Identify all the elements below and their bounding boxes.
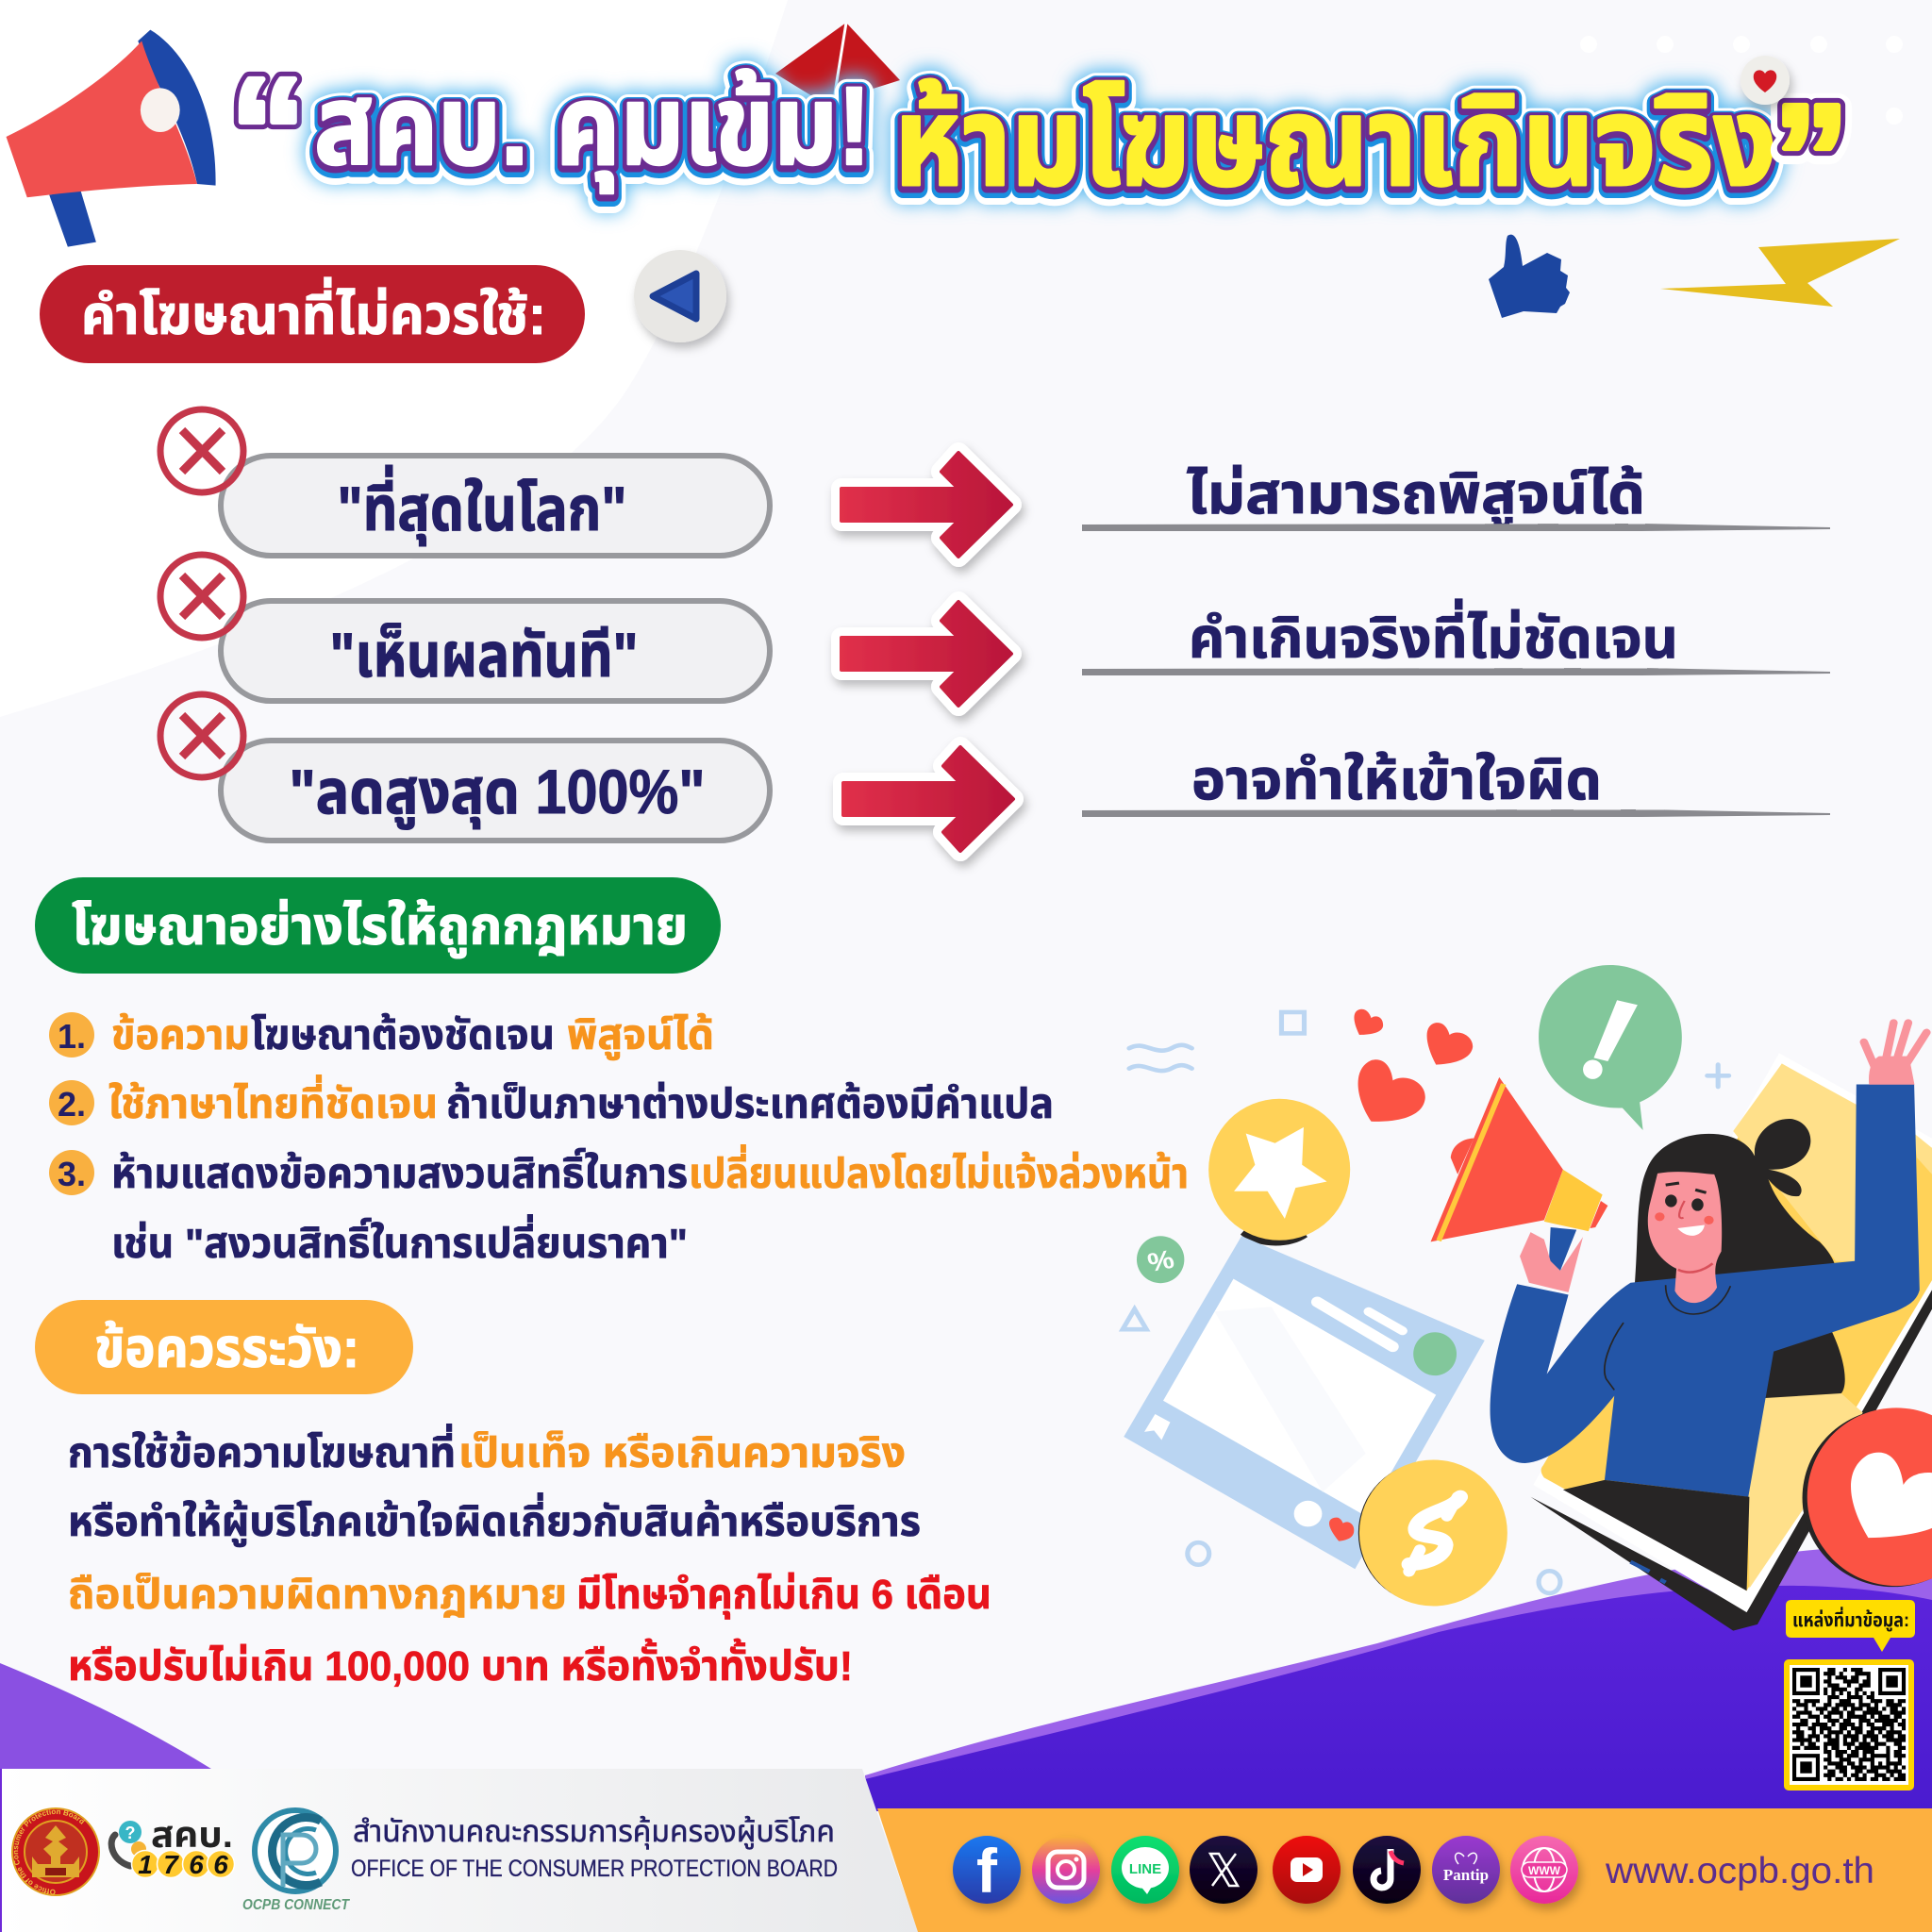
- speech bubble: [1539, 965, 1682, 1130]
- footer band right: [877, 1808, 1932, 1932]
- hearts: [1354, 1009, 1473, 1122]
- pill 2: [221, 601, 770, 701]
- sweater: [1491, 1084, 1920, 1497]
- title part two: ห้ามโฆษณาเกินจริง: [894, 75, 1776, 213]
- title part two: ห้ามโฆษณาเกินจริง: [894, 76, 1776, 215]
- pill 1: "ที่สุดในโลก": [338, 465, 626, 546]
- caution line 3: มีโทษจำคุกไม่เกิน 6 เดือน: [576, 1572, 991, 1620]
- paper plane: [775, 23, 900, 104]
- OCPB connect logo: [242, 1810, 350, 1913]
- heading: caution: ข้อควรระวัง:: [94, 1318, 359, 1379]
- number badge 2: [49, 1080, 94, 1125]
- row 3: [160, 694, 1830, 851]
- caution line 3: [68, 1572, 991, 1620]
- heart button: [1740, 56, 1790, 105]
- raised hand: [1864, 1023, 1926, 1084]
- holding hand: [1520, 1232, 1583, 1292]
- number badge 3: 3.: [58, 1155, 86, 1193]
- rule 2: ถ้าเป็นภาษาต่างประเทศต้องมีคำแปล: [446, 1081, 1054, 1127]
- rule 1: [111, 1012, 714, 1060]
- x mark 2: [160, 555, 243, 638]
- title part two: ห้ามโฆษณาเกินจริง: [894, 73, 1776, 211]
- rule 3: [111, 1144, 1189, 1197]
- heart badge: [1803, 1407, 1932, 1587]
- pill 3: [221, 741, 770, 841]
- hotline logo: ?: [125, 1824, 136, 1842]
- decorative dots: [1580, 36, 1903, 125]
- caution line 1: เป็นเท็จ หรือเกินความจริง: [458, 1430, 906, 1476]
- footer panel left: [0, 1769, 918, 1932]
- decorative shapes: [1123, 1012, 1729, 1593]
- number badge 1: [49, 1012, 94, 1058]
- result 3: อาจทำให้เข้าใจผิด: [1191, 748, 1602, 811]
- title part one: สคบ. คุมเข้ม!: [314, 64, 871, 193]
- caution line 4: หรือปรับไม่เกิน 100,000 บาท หรือทั้งจำทั้งปรับ!: [68, 1639, 853, 1690]
- number badge 3: [49, 1150, 94, 1195]
- social post card: [1124, 1236, 1485, 1569]
- title part one: สคบ. คุมเข้ม!: [314, 70, 871, 199]
- website: WWW: [1528, 1864, 1561, 1877]
- result 1: [1082, 462, 1830, 531]
- megaphone: [1431, 1077, 1607, 1273]
- rule 2: [108, 1074, 1054, 1127]
- seal logo: Office of the Consumer Protection Board: [13, 1809, 85, 1894]
- skirt: [1563, 1480, 1749, 1591]
- heading: how to advertise legally: โฆษณาอย่างไรให้ถูกกฎหมาย: [72, 896, 688, 958]
- facebook: f: [976, 1836, 998, 1906]
- purple wave bottom right: [865, 1547, 1932, 1811]
- percent badge: %: [1145, 1244, 1177, 1278]
- pill 3: "ลดสูงสุด 100%": [289, 757, 706, 829]
- heading: words to avoid: [40, 265, 585, 363]
- closing quote: ”: [1774, 73, 1849, 242]
- website address: www.ocpb.go.th: [1605, 1851, 1874, 1891]
- arrow 1: [841, 453, 1011, 557]
- line: LINE: [1129, 1861, 1161, 1877]
- website: [1510, 1836, 1578, 1904]
- social icons: [953, 1836, 1578, 1906]
- result 2: คำเกินจริงที่ไม่ชัดเจน: [1189, 598, 1678, 670]
- rule 1: ข้อความ: [111, 1012, 250, 1058]
- organisation name: OFFICE OF THE CONSUMER PROTECTION BOARD: [351, 1856, 838, 1882]
- line: [1111, 1836, 1179, 1904]
- rule 2: ใช้ภาษาไทยที่ชัดเจน: [108, 1074, 438, 1127]
- heading: caution: [35, 1300, 413, 1394]
- purple corner bottom left: [0, 1663, 219, 1774]
- title: [230, 46, 1849, 243]
- rule 3: เปลี่ยนแปลงโดยไม่แจ้งล่วงหน้า: [689, 1144, 1189, 1197]
- number badge 1: 1.: [58, 1017, 86, 1056]
- hotline number: 1766: [138, 1850, 228, 1879]
- lightning bolt: [1660, 239, 1900, 307]
- tiktok: [1353, 1836, 1421, 1904]
- eyes and mouth: [1655, 1183, 1714, 1273]
- result 1: ไม่สามารถพิสูจน์ได้: [1187, 462, 1645, 528]
- source tooltip: [1786, 1600, 1915, 1652]
- dollar badge: [1358, 1459, 1507, 1607]
- caution line 1: [68, 1424, 906, 1476]
- title part two: ห้ามโฆษณาเกินจริง: [894, 76, 1776, 215]
- title part one: สคบ. คุมเข้ม!: [314, 68, 871, 197]
- pantip: Pantip: [1443, 1866, 1489, 1884]
- rule 1: พิสูจน์ได้: [567, 1012, 714, 1060]
- row 2: [160, 555, 1830, 706]
- illustration: [1123, 965, 1932, 1631]
- title part one: สคบ. คุมเข้ม!: [314, 66, 871, 195]
- hair: [1635, 1119, 1845, 1398]
- heading: words to avoid: คำโฆษณาที่ไม่ควรใช้:: [81, 276, 546, 346]
- qr code: [1784, 1659, 1914, 1790]
- OCPB connect caption: OCPB CONNECT: [242, 1897, 350, 1913]
- x: [1190, 1836, 1257, 1904]
- megaphone top left: [7, 30, 216, 247]
- woman: [1431, 1023, 1926, 1591]
- percent badge: [1137, 1236, 1184, 1283]
- round back button: [634, 250, 726, 342]
- hotline logo: [111, 1816, 234, 1879]
- instagram: [1032, 1836, 1100, 1904]
- rule 3: ห้ามแสดงข้อความสงวนสิทธิ์ในการ: [111, 1148, 688, 1197]
- title part two: ห้ามโฆษณาเกินจริง: [894, 78, 1776, 217]
- closing quote: ”: [1774, 75, 1849, 243]
- opening quote: “: [230, 46, 306, 215]
- source tooltip: แหล่งที่มาข้อมูล:: [1792, 1607, 1909, 1631]
- caution paragraph: [68, 1424, 991, 1690]
- rule 1: โฆษณาต้องชัดเจน: [251, 1012, 555, 1058]
- arrow 2: [841, 602, 1011, 706]
- rule 3 example: เช่น "สงวนสิทธิ์ในการเปลี่ยนราคา": [111, 1214, 688, 1267]
- x mark 1: [160, 409, 243, 492]
- opening quote: “: [230, 46, 306, 215]
- star badge: [1208, 1099, 1350, 1245]
- hotline logo: สคบ.: [151, 1816, 233, 1856]
- organisation name: [351, 1814, 838, 1882]
- caution line 1: การใช้ข้อความโฆษณาที่: [68, 1424, 456, 1476]
- closing quote: ”: [1774, 73, 1849, 242]
- list of rules: [49, 1012, 1189, 1267]
- face: [1648, 1172, 1722, 1303]
- pill 1: [221, 456, 770, 556]
- x mark 3: [160, 694, 243, 777]
- caution line 3: ถือเป็นความผิดทางกฎหมาย: [68, 1572, 567, 1618]
- title part one: สคบ. คุมเข้ม!: [314, 68, 871, 197]
- opening quote: “: [230, 48, 306, 217]
- organisation name: สำนักงานคณะกรรมการคุ้มครองผู้บริโภค: [353, 1814, 835, 1850]
- pill 2: "เห็นผลทันที": [330, 620, 638, 690]
- result 3: [1082, 748, 1830, 817]
- youtube: [1273, 1836, 1341, 1904]
- row 1: [160, 409, 1830, 557]
- facebook: [953, 1836, 1021, 1906]
- result 2: [1082, 598, 1830, 675]
- phone: [1530, 1053, 1932, 1631]
- arrow 3: [843, 747, 1013, 851]
- thumbs up icon: [1489, 235, 1570, 318]
- pantip: [1432, 1836, 1500, 1904]
- heading: how to advertise legally: [35, 877, 721, 974]
- caution line 2: หรือทำให้ผู้บริโภคเข้าใจผิดเกี่ยวกับสินค้าหรือบริการ: [68, 1492, 921, 1547]
- number badge 2: 2.: [58, 1085, 86, 1124]
